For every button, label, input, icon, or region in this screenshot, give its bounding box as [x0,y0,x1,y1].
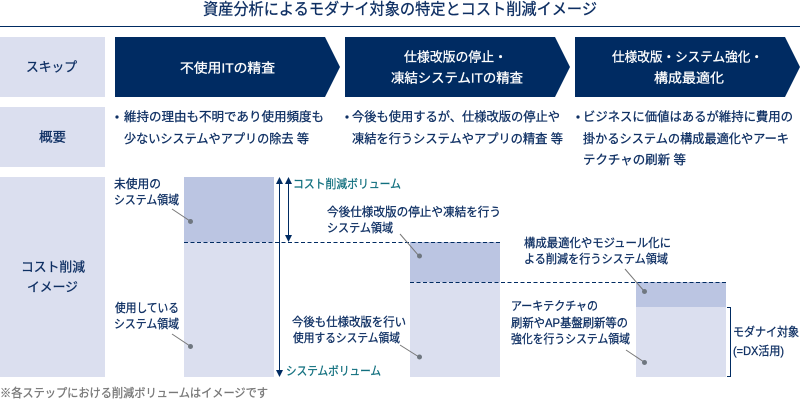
overview text 1: 維持の理由も不明であり使用頻度も [124,109,324,124]
callout: unused system area [114,176,193,224]
callout: stopped or frozen system area [327,204,501,258]
step arrow 2: 仕様改版の停止・ [404,50,507,64]
label: modernisation target [733,324,799,358]
overview text 3: テクチャの刷新 等 [583,152,686,167]
callout: unused system area: システム領域 [114,193,179,207]
callout: continuing system area: 使用するシステム領域 [293,330,400,345]
overview text 1: 少ないシステムやアプリの除去 等 [124,131,309,146]
step arrow 1 [115,37,340,97]
step arrow 3: 構成最適化 [654,70,724,86]
bar 2: frozen and continuing system area [410,242,500,377]
arrow: system volume [276,177,283,377]
callout: optimised system area: 構成最適化やモジュール化に [524,236,671,250]
label: system volume: システムボリューム [286,364,381,378]
step arrow 2 [345,37,570,97]
callout: used system area [114,300,193,349]
bar 3: optimised and modernised system area [636,282,726,377]
label: modernisation target: (=DX活用) [733,344,784,358]
row label: コスト削減イメージ: イメージ [27,280,78,294]
step arrow 3 [575,37,800,97]
callout: stopped or frozen system area: システム領域 [327,221,393,235]
overview text 3: ビジネスに価値はあるが維持に費用の [583,109,793,124]
callout: optimised system area: よる削減を行うシステム領域 [524,251,668,266]
callout: used system area: システム領域 [114,317,179,331]
callout: architecture strengthening system area [511,299,647,365]
callout: architecture strengthening system area: 強化を行うシステム領域 [511,332,630,346]
callout: architecture strengthening system area: アーキテクチャの [511,299,598,313]
label: cost reduction volume: コスト削減ボリューム [293,176,401,191]
row label: コスト削減イメージ: コスト削減 [21,260,85,274]
callout: unused system area: 未使用の [114,176,161,191]
step arrow 1: 不使用ITの精査 [180,60,275,76]
callout: used system area: 使用している [115,300,179,315]
step arrow 3: 仕様改版・システム強化・ [612,50,763,64]
row label: スキップ [0,37,105,97]
callout: continuing system area [292,314,422,360]
step arrow 2: 凍結システムITの精査 [391,70,523,86]
overview text 3: 掛かるシステムの構成最適化やアーキ [583,131,789,146]
row label: コスト削減イメージ [0,177,105,377]
overview text 2: 今後も使用するが、仕様改版の停止や [352,109,560,124]
bracket: modernisation target [727,308,730,376]
overview text 3 [576,109,793,167]
overview text 2: 凍結を行うシステムやアプリの精査 等 [352,131,563,146]
callout: stopped or frozen system area: 今後仕様改版の停止や凍結を行う [327,204,501,219]
overview text 2 [345,109,563,146]
overview text 1 [115,109,324,146]
bar 1: unused and used system area [184,177,274,377]
row label: 概要 [0,107,105,167]
callout: optimised system area [524,236,671,294]
footnote: ※各ステップにおける削減ボリュームはイメージです [0,385,268,400]
callout: architecture strengthening system area: 刷新やAP基盤刷新等の [511,316,628,330]
row label: スキップ: スキップ [26,60,77,74]
arrow: cost reduction volume [285,177,292,242]
callout: continuing system area: 今後も仕様改版を行い [292,314,406,329]
row label: 概要: 概要 [39,130,66,144]
title: 資産分析によるモダナイ対象の特定とコスト削減イメージ [203,0,597,18]
